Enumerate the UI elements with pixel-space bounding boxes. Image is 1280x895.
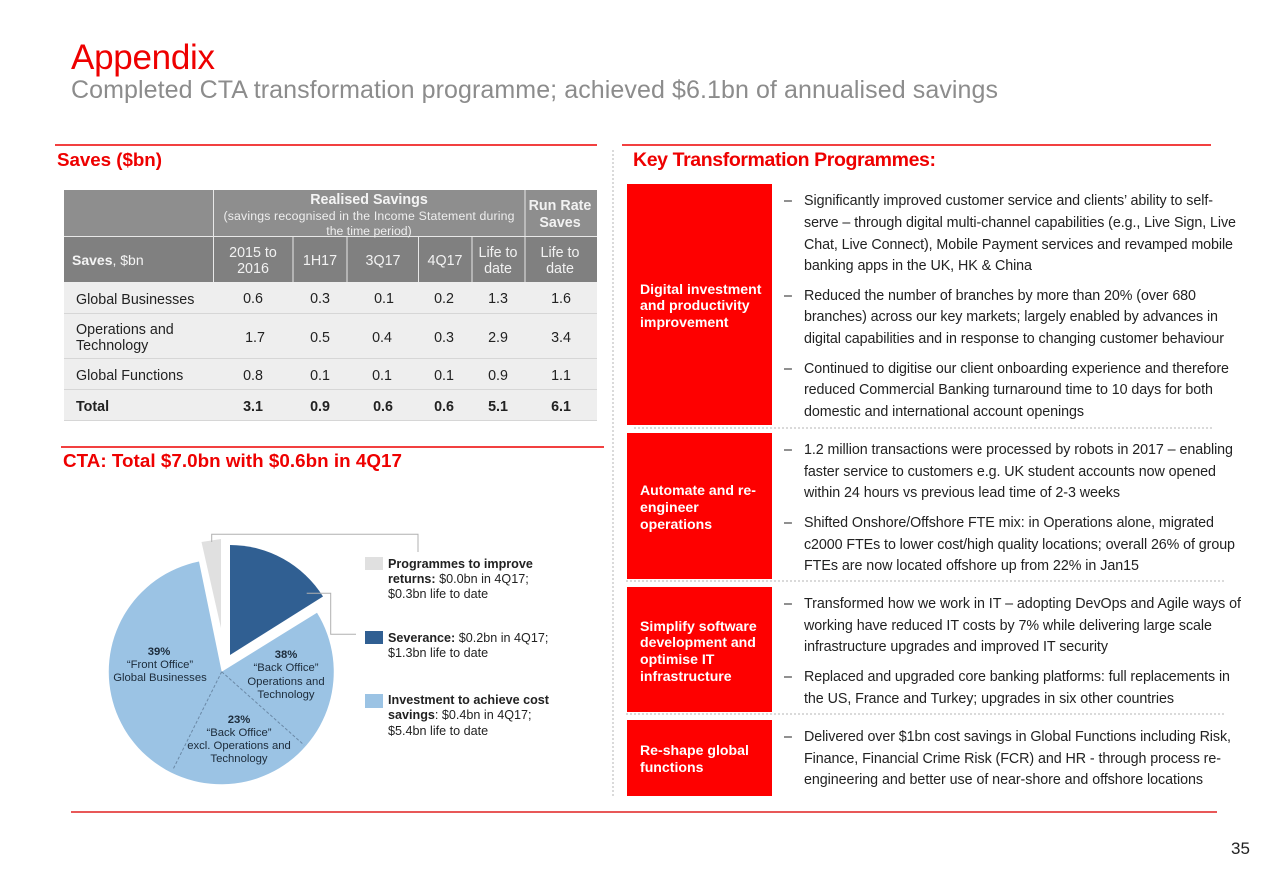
table rows: 2.9 [488, 330, 508, 346]
legend [365, 557, 550, 738]
table header: Saves, $bn [72, 252, 144, 268]
bullets: automate: Shifted Onshore/Offshore FTE mix: in Operations alone, migrated [804, 515, 1214, 531]
subtitle: Completed CTA transformation programme; achieved $6.1bn of annualised savings [71, 76, 998, 104]
table header: date [484, 261, 512, 277]
bullets: digital investment: Reduced the number of branches by more than 20% (over 680 [804, 288, 1196, 304]
legend item: investment: Investment to achieve cost [388, 693, 550, 707]
panel: digital investment: and productivity [640, 297, 750, 313]
slice: severance [230, 545, 323, 655]
table rows: Technology [76, 338, 149, 354]
bullets: automate: – [784, 515, 792, 531]
bullets: simplify software: working have reduced IT costs by 7% while delivering large scale [803, 618, 1212, 634]
bullets: digital investment: branches) across our key markets; largely enabled by advances in [804, 309, 1218, 325]
bullets: digital investment: Significantly improved customer service and clients’ ability to self- [804, 193, 1213, 209]
pie label: back office excl. operations: excl. Operations and [187, 740, 291, 752]
panel: digital investment [627, 184, 772, 425]
legend item: programmes [365, 557, 533, 601]
bullets: automate: FTEs are now located offshore up from 22% in Jan15 [804, 558, 1139, 574]
pie label: front office: 39% [148, 646, 170, 658]
legend item: investment: $5.4bn life to date [388, 724, 488, 738]
bullets: simplify software: the US, France and Turkey; upgrades in six other countries [804, 691, 1174, 707]
bullets: automate: within 24 hours vs previous lead time of 2-3 weeks [803, 485, 1120, 501]
table rows: 0.1 [372, 368, 392, 384]
legend item: programmes: $0.3bn life to date [388, 587, 488, 601]
slice: investment to achieve cost savings [109, 562, 334, 784]
table header: 4Q17 [428, 253, 463, 269]
table header: Saves [539, 215, 581, 231]
table rows: 1.1 [551, 368, 571, 384]
title: Appendix [71, 38, 216, 77]
bullets: automate: faster service to customers e.g. UK student accounts now opened [804, 464, 1216, 480]
table rows [64, 282, 597, 421]
heading: saves: Saves ($bn) [57, 149, 162, 170]
heading: CTA: CTA: Total $7.0bn with $0.6bn in 4Q17 [63, 450, 402, 471]
bullets: re-shape [784, 729, 1231, 788]
table rows: 6.1 [551, 399, 571, 415]
table rows: 0.2 [434, 291, 454, 307]
panel: simplify software [627, 587, 772, 712]
table rows: 0.6 [373, 399, 393, 415]
table header: Life to [541, 245, 580, 261]
bullets: digital investment [784, 193, 1236, 420]
bullets: digital investment: domestic and international account openings [804, 404, 1084, 420]
panel: re-shape: functions [640, 759, 704, 775]
table rows: 0.6 [434, 399, 454, 415]
panel: simplify software: development and [640, 634, 756, 650]
table header: 1H17 [303, 253, 337, 269]
pie chart [109, 534, 418, 784]
bullets: simplify software: infrastructure upgrades and improved IT security [804, 639, 1109, 655]
bullets: digital investment: serve – through digital multi-channel capabilities (e.g., Live Sign, Live [804, 215, 1236, 231]
bullets: simplify software: Replaced and upgraded core banking platforms: full replacements in [804, 669, 1230, 685]
bullets: digital investment: reduced Commercial Banking turnaround time to 10 days for both [804, 382, 1213, 398]
table rows: 5.1 [488, 399, 508, 415]
legend item: programmes: Programmes to improve [388, 557, 533, 571]
table rows: 0.5 [310, 330, 330, 346]
panel: automate: engineer [640, 499, 699, 515]
bullets: automate [784, 442, 1235, 574]
table rows: 0.9 [488, 368, 508, 384]
slice: programmes to improve returns [202, 539, 221, 628]
table header: 3Q17 [366, 253, 401, 269]
bullets: re-shape: Delivered over $1bn cost savings in Global Functions including Risk, [804, 729, 1231, 745]
legend item: severance: $1.3bn life to date [388, 646, 488, 660]
bullets: automate: 1.2 million transactions were processed by robots in 2017 – enabling [804, 442, 1233, 458]
panel: simplify software: Simplify software [640, 618, 757, 634]
panel: simplify software: optimise IT [640, 651, 715, 667]
table rows: 1.3 [488, 291, 508, 307]
legend item: programmes: returns: $0.0bn in 4Q17; [388, 572, 529, 586]
pie label: back office operations [247, 649, 325, 701]
table header: Run Rate [529, 198, 591, 214]
bullets: automate: – [784, 442, 792, 458]
pie label: back office excl. operations: 23% [228, 714, 250, 726]
table rows: 0.8 [243, 368, 263, 384]
bullets: digital investment: Continued to digitise our client onboarding experience and therefore [804, 361, 1229, 377]
legend item: investment: savings: $0.4bn in 4Q17; [388, 708, 532, 722]
table rows: Global Functions [76, 368, 183, 384]
table rows: 1.6 [551, 291, 571, 307]
table rows: 0.1 [374, 291, 394, 307]
table rows: 3.4 [551, 330, 571, 346]
pie label: back office operations: “Back Office” [253, 662, 319, 674]
table rows: Total [76, 399, 109, 415]
page number: 35 [1231, 839, 1250, 858]
table rows: 0.3 [310, 291, 330, 307]
panel: digital investment: improvement [640, 314, 729, 330]
bullets: simplify software: Transformed how we work in IT – adopting DevOps and Agile ways of [804, 596, 1241, 612]
table rows: 3.1 [243, 399, 263, 415]
pie label: back office excl. operations: Technology [210, 753, 268, 765]
table header: Realised Savings [310, 192, 428, 208]
bullets: digital investment: digital capabilities and in response to changing customer behaviour [804, 331, 1224, 347]
bullets: digital investment: banking apps in the UK, HK & China [804, 258, 1032, 274]
pie label: back office excl. operations: “Back Office” [206, 727, 272, 739]
table rows: 0.1 [434, 368, 454, 384]
bullets: re-shape: engineering and better use of near-shore and offshore locations [804, 772, 1203, 788]
bullets: simplify software: – [784, 669, 792, 685]
bullets: digital investment: – [784, 193, 792, 209]
pie label: back office operations: 38% [275, 649, 297, 661]
panel: automate [627, 433, 772, 579]
table header [64, 190, 597, 282]
pie label: front office: Global Businesses [113, 672, 207, 684]
heading: key transformation programmes: Key Transformation Programmes: [633, 149, 936, 171]
panel: automate: operations [640, 516, 712, 532]
table header: the time period) [326, 224, 412, 238]
bullets: digital investment: Chat, Live Connect), Mobile Payment services and revamped mobile [804, 237, 1233, 253]
table rows: 1.7 [245, 330, 265, 346]
table header: date [546, 261, 574, 277]
table header: (savings recognised in the Income Statement during [224, 209, 515, 223]
pie label: back office operations: Technology [257, 689, 315, 701]
panel: re-shape: Re-shape global [640, 742, 749, 758]
table rows: 0.9 [310, 399, 330, 415]
pie label: front office: “Front Office” [127, 659, 193, 671]
table rows: 0.4 [372, 330, 392, 346]
pie label: back office operations: Operations and [247, 676, 325, 688]
bullets: automate: c2000 FTEs to lower cost/high quality locations; overall 26% of group [804, 537, 1235, 553]
bullets: simplify software: – [784, 596, 792, 612]
table rows: 0.6 [243, 291, 263, 307]
bullets: simplify software [784, 596, 1241, 707]
bullets: digital investment: – [784, 361, 792, 377]
pie label: front office [113, 646, 207, 684]
table rows: Operations and [76, 322, 174, 338]
panel: simplify software: infrastructure [640, 668, 732, 684]
panel: digital investment: Digital investment [640, 281, 762, 297]
table header: 2015 to [229, 245, 277, 261]
legend item: severance [365, 631, 548, 660]
bullets: re-shape: – [784, 729, 792, 745]
table: saves [64, 190, 597, 421]
table rows: 0.1 [310, 368, 330, 384]
panel: re-shape [627, 720, 772, 796]
bullets: re-shape: Finance, Financial Crime Risk (FCR) and HR - through process re- [804, 751, 1221, 767]
table header: 2016 [237, 261, 269, 277]
table rows: 0.3 [434, 330, 454, 346]
panel: automate: Automate and re- [640, 482, 756, 498]
legend item: investment [365, 693, 550, 738]
table header: Life to [479, 245, 518, 261]
legend item: severance: Severance: $0.2bn in 4Q17; [388, 631, 548, 645]
pie label: back office excl. operations [187, 714, 291, 765]
table rows: Global Businesses [76, 292, 194, 308]
bullets: digital investment: – [784, 288, 792, 304]
